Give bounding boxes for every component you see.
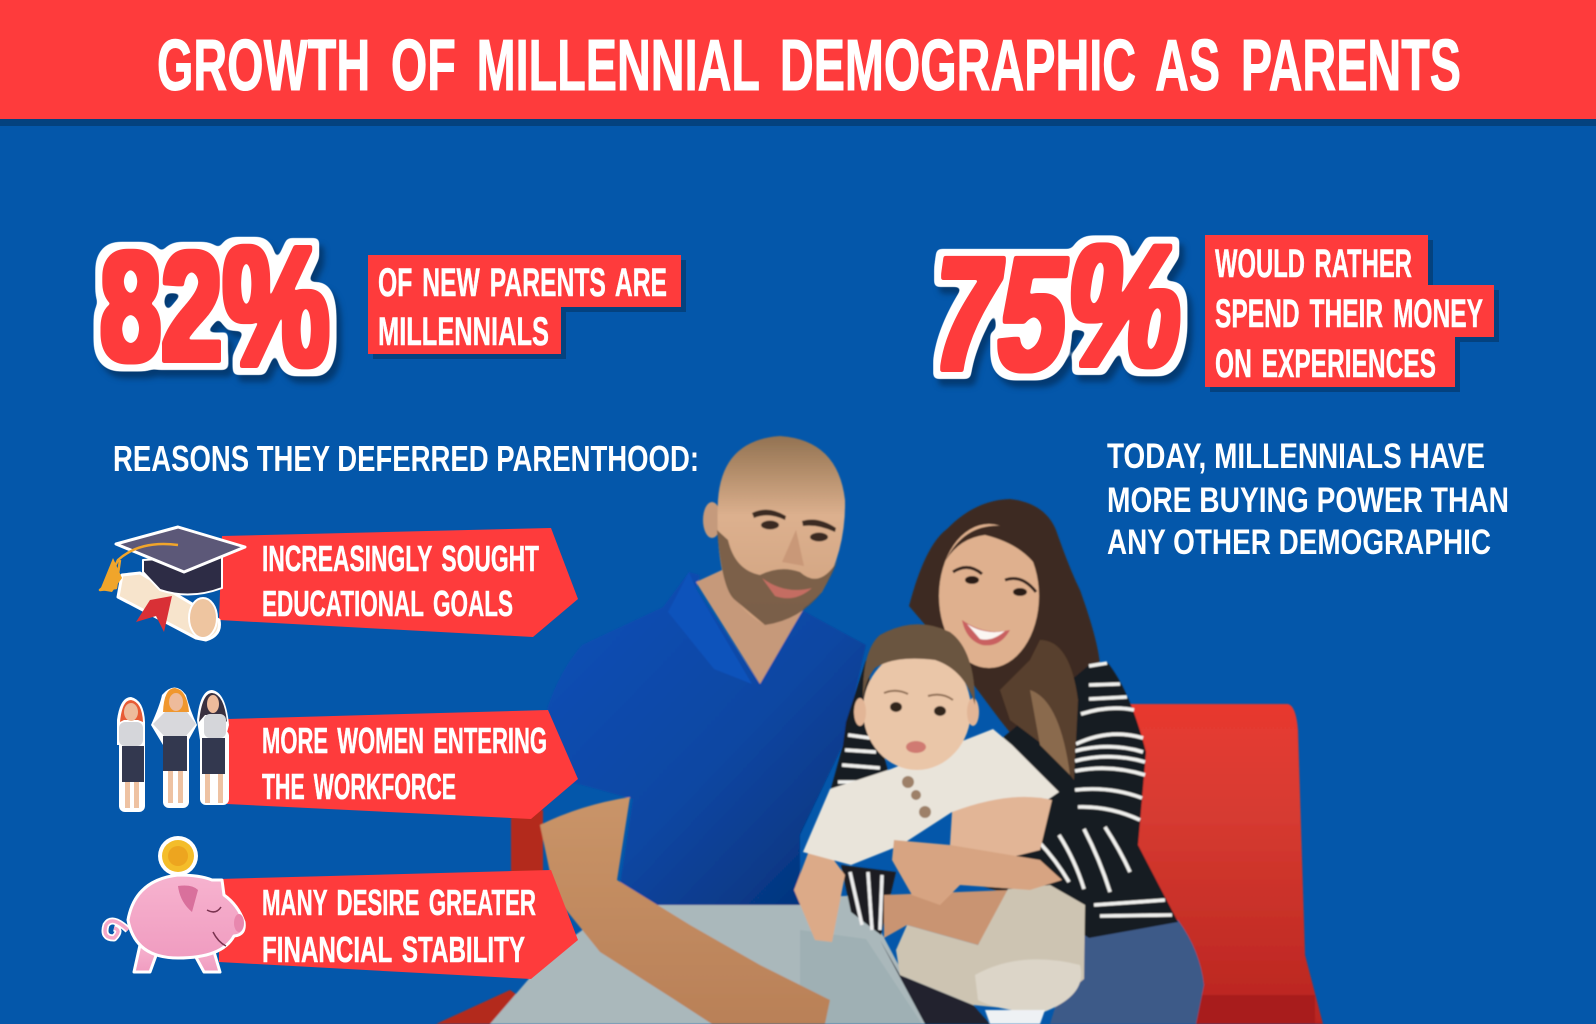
coin xyxy=(158,836,198,876)
man polo shirt xyxy=(547,572,866,905)
baby face xyxy=(884,691,953,753)
pig tail xyxy=(105,921,128,938)
woman hair back xyxy=(909,499,1100,780)
reason 1 text: EDUCATIONAL GOALS xyxy=(262,583,513,624)
baby and arms xyxy=(794,624,1085,1024)
label: would rather spend their money on experiences: ON EXPERIENCES xyxy=(1215,342,1436,386)
baby shirt xyxy=(803,729,1059,865)
center woman xyxy=(151,688,197,808)
heading: reasons they deferred parenthood: REASONS THEY DEFERRED PARENTHOOD: xyxy=(113,438,699,479)
man jeans xyxy=(490,895,930,1024)
woman xyxy=(909,499,1204,1024)
icon: three working women xyxy=(117,688,229,812)
label: would rather spend their money on experiences xyxy=(1205,235,1499,392)
woman lower arm xyxy=(841,865,896,935)
text block: buying power: ANY OTHER DEMOGRAPHIC xyxy=(1107,523,1491,562)
woman hair lock xyxy=(1000,640,1078,780)
reason 1 text: INCREASINGLY SOUGHT xyxy=(262,538,539,579)
man head xyxy=(718,436,845,625)
icon: graduation cap and diploma xyxy=(100,527,245,640)
text block: buying power: MORE BUYING POWER THAN xyxy=(1107,481,1509,520)
man eyes and brows xyxy=(752,510,836,542)
reason 3 text: FINANCIAL STABILITY xyxy=(262,929,525,970)
woman thigh skin xyxy=(884,890,1010,945)
woman torso and right arm xyxy=(960,662,1178,938)
arrow banner 1 xyxy=(219,528,578,637)
text block: buying power xyxy=(1107,437,1509,562)
big number 75%: 75 xyxy=(921,225,1080,404)
baby arm right xyxy=(950,797,1052,860)
man arm xyxy=(540,797,830,1024)
baby head xyxy=(863,650,971,770)
stat: 75 percent prefer experiences xyxy=(921,211,1499,404)
dark gap between legs xyxy=(880,940,990,1024)
text block: buying power: TODAY, MILLENNIALS HAVE xyxy=(1107,437,1485,476)
baby arm left xyxy=(794,835,845,942)
big number 75%: % xyxy=(1055,211,1196,402)
woman forearm and hand xyxy=(892,840,1062,905)
pig legs xyxy=(134,945,220,972)
woman left arm stripes xyxy=(825,660,896,825)
man beard xyxy=(717,530,838,625)
reason 2 text xyxy=(262,720,547,807)
reason 2 text: THE WORKFORCE xyxy=(262,766,456,807)
pig body xyxy=(128,875,244,958)
man collar xyxy=(668,572,752,684)
label: of new parents are millennials: OF NEW PARENTS ARE xyxy=(378,261,667,305)
reason 3 text xyxy=(262,882,536,970)
reason 3: financial stability xyxy=(105,836,578,979)
stat: 82 percent of new parents xyxy=(100,213,686,402)
label: of new parents are millennials: MILLENNIALS xyxy=(378,310,549,354)
big number 75% xyxy=(921,211,1196,404)
sofa xyxy=(436,704,1323,1024)
arrow banner 3 xyxy=(219,870,578,979)
big number 82%: 82 xyxy=(100,220,222,393)
family photo illustration xyxy=(436,436,1323,1024)
label: would rather spend their money on experiences: WOULD RATHER xyxy=(1215,242,1412,286)
label: of new parents are millennials xyxy=(368,255,686,359)
woman face xyxy=(939,524,1039,668)
man xyxy=(490,436,990,1024)
man ear xyxy=(703,502,721,538)
reason 3 text: MANY DESIRE GREATER xyxy=(262,882,536,923)
reason 1 text xyxy=(262,538,539,624)
left woman xyxy=(117,697,145,812)
reason 2 text: MORE WOMEN ENTERING xyxy=(262,720,547,761)
man neck xyxy=(696,570,815,684)
reason 2: women in the workforce xyxy=(117,688,578,819)
woman jeans xyxy=(1050,920,1204,1024)
big number 82% xyxy=(100,213,330,402)
baby hair xyxy=(863,624,975,705)
icon: piggy bank and coin xyxy=(105,836,244,972)
right woman xyxy=(197,690,229,805)
woman sleeve stripes xyxy=(1039,663,1172,916)
reason 1: educational goals xyxy=(100,527,578,640)
header banner xyxy=(0,0,1596,126)
baby legs xyxy=(896,885,1085,1012)
big number 82%: % xyxy=(222,213,330,402)
arrow banner 2 xyxy=(227,710,578,819)
